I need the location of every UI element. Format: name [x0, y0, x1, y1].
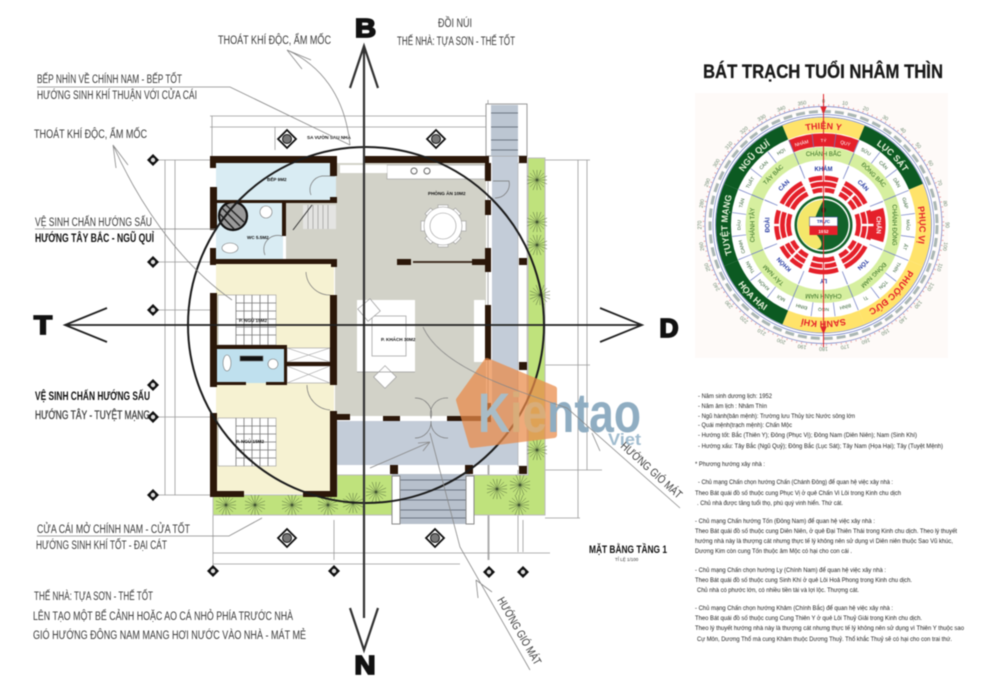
- plants: [216, 170, 550, 515]
- trigram names: CÀN: [777, 179, 791, 193]
- right column: east orientation: - Chủ mạng Chấn chọn hướng Chấn (Chánh Đông) để quan hệ việc xây nhà :: [698, 479, 893, 486]
- twenty-four mountain labels: MÙI: [776, 293, 787, 303]
- left note: WC north-west: [35, 216, 155, 245]
- outer degree labels: 80: [941, 200, 948, 207]
- right column: birth details: [698, 393, 943, 450]
- sector labels: LỤC SÁT: [876, 140, 910, 171]
- outer degree labels: 90: [944, 222, 950, 228]
- front stair: [392, 474, 474, 524]
- right column: east orientation: . Chủ nhà được tăng tuổi thọ, phú quý vinh hiển. Thứ cát.: [697, 500, 843, 507]
- right column: north orientation: [695, 605, 965, 643]
- outer degree labels: 150: [880, 327, 890, 336]
- bed 1: [218, 295, 276, 345]
- twenty-four mountain labels: TỊ: [862, 294, 869, 301]
- living room furniture: [357, 299, 485, 388]
- right column: birth details: - Năm âm lịch : Nhâm Thìn: [698, 403, 768, 410]
- left note: WC north-west: HƯỚNG TÂY BẮC - NGŨ QUỈ: [35, 232, 155, 245]
- watermark logo: Viet: [608, 430, 641, 449]
- entry threshold strip: [337, 416, 490, 421]
- twenty-four mountain separators: [728, 130, 919, 320]
- right column: south orientation: - Chủ mạng Chấn chọn hướng Ly (Chính Nam) để quan hệ việc xây nhà :: [695, 567, 886, 574]
- rear stair: [486, 104, 527, 156]
- outer degree labels: [698, 99, 950, 351]
- direction labels: CHÁNH TÂY: [750, 208, 756, 242]
- room: stair hall and main living space: [286, 163, 486, 416]
- right column: birth details: - Năm sinh dương lịch: 1952: [698, 393, 773, 400]
- outer degree labels: 20: [862, 106, 869, 113]
- direction labels: CHÁNH BẮC: [806, 150, 842, 158]
- right column: north orientation: Cự Môn, Dương Thổ mà cung Khảm thuộc Dương Thuỷ. Thổ khắc Thuỷ sẽ có hại cho con trai thứ.: [697, 636, 952, 643]
- outer degree labels: 60: [926, 159, 934, 168]
- left note: kitchen: [37, 72, 197, 102]
- right column: heading: * Phương hướng xây nhà :: [695, 461, 765, 468]
- bed 2: [218, 418, 276, 466]
- right column: north orientation: Theo lý thuyết hướng nhà này là thượng cát nhưng thực tế lý không nên sử dụng vì Thiên Y thuộc sao: [695, 625, 965, 632]
- outer degree labels: 200: [776, 336, 787, 345]
- twenty-four mountain labels: THÂN: [744, 259, 757, 275]
- twenty-four mountain labels: [736, 137, 912, 312]
- compass axis: west-east arrow: [65, 308, 642, 342]
- twenty-four mountain labels: TÂN: [737, 197, 747, 209]
- outer degree labels: 30: [881, 114, 889, 123]
- bottom note: site: LÊN TẠO MỘT BỂ CẢNH HOẶC AO CÁ NHỎ PHÍA TRƯỚC NHÀ: [33, 610, 293, 623]
- trigram ring separators: [749, 151, 898, 299]
- twenty-four mountain labels: TÝ: [820, 137, 827, 144]
- trigram names: CẤN: [856, 179, 870, 193]
- direction labels: CHÁNH ĐÔNG: [890, 204, 898, 246]
- sector labels: THIÊN Y: [804, 120, 842, 131]
- wind label south: HƯỚNG GIÓ MÁT: [494, 595, 544, 667]
- direction labels: ĐÔNG NAM: [859, 261, 887, 289]
- wind label east: HƯỚNG GIÓ MÁT: [618, 440, 685, 501]
- trigram names: TỐN: [856, 257, 870, 271]
- red trigrams: [774, 175, 874, 272]
- bagua wheel backdrop: [695, 93, 948, 358]
- central emblem: 1952: [818, 229, 829, 234]
- grid markers: [147, 130, 529, 578]
- outer degree labels: 260: [699, 241, 706, 251]
- right column: birth details: - Ngũ hành(bản mệnh): Trường lưu Thủy tức Nước sông lớn: [698, 413, 856, 420]
- left note: kitchen: BẾP NHÌN VỀ CHÍNH NAM - BẾP TỐT: [37, 72, 182, 86]
- right column: south orientation: Chủ nhà có phước lớn, có nhiều tiền tài và lợi lộc. Thượng cát.: [697, 587, 859, 594]
- twenty-four mountain labels: BÍNH: [838, 302, 852, 312]
- trigram names: KHÔN: [775, 256, 793, 274]
- bottom note: site: THẾ NHÀ: TỰA SƠN - THẾ TỐT: [34, 589, 153, 603]
- plan title: MẶT BẰNG TẦNG 1: [589, 543, 667, 556]
- outer degree labels: 110: [935, 262, 943, 272]
- room: bedrooms: [216, 264, 334, 494]
- room: kitchen: [216, 163, 336, 201]
- room labels: BẾP 9M2: [267, 176, 287, 182]
- room labels: [236, 133, 466, 444]
- sector labels: [719, 120, 926, 328]
- sector labels: TUYỆT MẠNG: [719, 194, 732, 257]
- room labels: WC 5.5M2: [247, 235, 269, 240]
- sector labels: HỌA HẠI: [738, 280, 768, 311]
- bagua circle over plan: [188, 147, 544, 503]
- outer degree labels: 240: [712, 281, 722, 292]
- top note: site: THẾ NHÀ: TỰA SƠN - THẾ TỐT: [397, 34, 515, 48]
- Chấn highlighted sector: [876, 210, 879, 240]
- sector labels: PHƯỚC ĐỨC: [868, 270, 914, 315]
- outer degree labels: 10: [841, 100, 848, 107]
- trigram name ring: [759, 160, 888, 290]
- twenty-four mountain labels: MÃO: [904, 220, 912, 231]
- outer degree labels: 140: [897, 314, 908, 324]
- twenty-four mountain labels: KHÔN: [756, 277, 771, 292]
- compass axis: north-south arrow: [350, 46, 378, 650]
- outer degree labels: 180: [819, 345, 828, 351]
- outer degree labels: 270: [698, 221, 704, 229]
- right column: south orientation: Theo Bát quái đồ số thuộc cung Sinh Khí ở quẻ Lôi Hoả Phong trong Kinh chu dịch.: [695, 577, 912, 584]
- trigram names: CHẤN: [874, 216, 882, 234]
- right column: birth details: - Hướng xấu: Tây Bắc (Ngũ Quỷ); Đông Bắc (Lục Sát); Tây Nam (Họa Hại); Tây (Tuyệt Mệnh): [698, 443, 943, 450]
- twenty-four mountain labels: SỬU: [859, 146, 873, 158]
- wheel title: BÁT TRẠCH TUỔI NHÂM THÌN: [703, 59, 943, 83]
- sector labels: SANH KHÍ: [800, 318, 846, 328]
- plan title: TỈ LỆ 1/100: [615, 555, 639, 562]
- right column: birth details: - Quái mệnh(trạch mệnh): Chấn Mộc: [698, 422, 792, 429]
- plan title: [589, 543, 667, 562]
- bottom note: site: GIÓ HƯỚNG ĐÔNG NAM MANG HƠI NƯỚC VÀO NHÀ - MÁT MẺ: [33, 629, 306, 642]
- room: WC: [216, 203, 283, 260]
- outer degree labels: 340: [776, 105, 787, 114]
- outer degree labels: 310: [724, 141, 734, 151]
- outer degree labels: 290: [704, 178, 712, 188]
- trigram names: [764, 166, 882, 283]
- outer degree labels: 300: [712, 158, 722, 169]
- right column: north orientation: Theo Bát quái đồ số thuộc cung Cung Thiên Y ở quẻ Lôi Thuỷ Giải trong Kinh chu dịch.: [695, 615, 922, 622]
- left note: main door: [36, 522, 190, 552]
- room labels: P. NGỦ 15M2: [236, 438, 264, 444]
- door swings: [264, 176, 509, 438]
- top note: hill: ĐỒI NÚI: [438, 17, 472, 30]
- right column: south-east orientation: [695, 518, 957, 555]
- direction letter D: D: [660, 313, 678, 343]
- direction letter B: B: [355, 13, 376, 43]
- direction labels: ĐÔNG BẮC: [860, 161, 888, 189]
- highlighted north cells: [791, 140, 856, 146]
- outer degree labels: 160: [860, 336, 871, 345]
- twenty-four mountain labels: HỢI: [776, 147, 787, 157]
- outer degree labels: 210: [757, 327, 767, 336]
- watermark logo: [459, 361, 641, 449]
- walls: [210, 156, 527, 497]
- top note: vent: THOÁT KHÍ ĐỘC, ẨM MỐC: [218, 33, 331, 47]
- direction labels: [750, 150, 898, 299]
- trigram names: KHẢM: [814, 166, 832, 173]
- dimension lines: [153, 100, 602, 572]
- right column: east orientation: [695, 479, 902, 507]
- dining table: [421, 205, 466, 247]
- twenty-four mountain labels: DẦN: [891, 177, 903, 189]
- outer degree labels: 330: [757, 114, 767, 123]
- left note: kitchen: HƯỚNG SINH KHÍ THUẬN VỚI CỬA CÁI: [37, 89, 197, 102]
- outer degree labels: 130: [913, 299, 923, 309]
- closets: [287, 348, 330, 383]
- outer degree labels: 250: [704, 262, 712, 272]
- twenty-four mountain labels: TUẤT: [744, 176, 757, 190]
- bagua wheel: [696, 93, 950, 352]
- twenty-four mountain labels: QUÝ: [839, 139, 852, 148]
- annotation leader lines: [35, 50, 680, 670]
- outer degree labels: 170: [840, 342, 850, 350]
- ring of twenty-four mountains: [738, 140, 908, 310]
- kitchen counter: [340, 165, 485, 179]
- trigram names: ĐOÀI: [764, 217, 772, 232]
- outer degree labels: 70: [935, 179, 943, 187]
- direction ring: [752, 154, 895, 296]
- twenty-four mountain labels: GIÁP: [900, 197, 910, 210]
- outer degree labels: 280: [699, 199, 706, 208]
- bathroom fixtures: [222, 206, 278, 371]
- outer degree labels: 120: [925, 281, 935, 292]
- twenty-four mountain labels: CẤN: [877, 159, 890, 172]
- sector labels: NGŨ QUỈ: [738, 138, 770, 172]
- spiral vent: [219, 202, 247, 230]
- stair flight: [293, 205, 336, 230]
- twenty-four mountain labels: CANH: [738, 239, 747, 254]
- garden strips: [213, 158, 545, 515]
- twenty-four mountain labels: ẤT: [901, 243, 909, 251]
- red meridian line: [821, 94, 826, 347]
- right column: south-east orientation: - Chủ mạng Chấn hướng Tốn (Đông Nam) để quan hệ việc xây nhà :: [695, 518, 875, 525]
- direction labels: CHÁNH NAM: [805, 292, 842, 299]
- outer degree labels: 220: [739, 314, 750, 324]
- outer degree labels: 100: [941, 242, 948, 251]
- outer degree labels: 350: [797, 100, 807, 108]
- outer tick and scale rings: [704, 105, 944, 345]
- outer degree labels: 190: [797, 342, 807, 350]
- right column: south-east orientation: Theo Bát quái đồ số thuộc cung Diên Niên, ở quẻ Đại Thiên Thái trong Kinh chu dịch. Theo lý thuyết: [695, 528, 957, 535]
- room labels: SA VƯỜN SAU NHÀ: [307, 133, 351, 140]
- left note: WC west: HƯỚNG TÂY - TUYỆT MẠNG: [35, 409, 150, 422]
- room labels: P. KHÁCH 30M2: [381, 336, 416, 342]
- floor plan: [147, 100, 602, 578]
- left note: main door: HƯỚNG SINH KHÍ TỐT - ĐẠI CÁT: [36, 538, 167, 552]
- right column: north orientation: - Chủ mạng Chấn chọn hướng Khảm (Chính Bắc) để quan hệ việc xây nhà :: [695, 605, 893, 612]
- room labels: P. NGỦ 15M2: [239, 317, 267, 323]
- trigram names: LY: [820, 277, 827, 283]
- left note: WC west: [35, 390, 150, 422]
- outer degree labels: 50: [914, 142, 922, 150]
- direction ring separators: [730, 132, 917, 318]
- left note: WC west: VỆ SINH CHẤN HƯỚNG SẤU: [35, 390, 150, 403]
- twenty-four mountain labels: NHÂM: [794, 138, 809, 149]
- left note: main door: CỬA CÁI MỞ CHÍNH NAM - CỬA TỐT: [37, 522, 190, 536]
- twenty-four mountain labels: TỐN: [877, 279, 889, 291]
- outer degree labels: 0: [822, 99, 825, 105]
- right column: south-east orientation: Dương Kim còn cung Tốn thuộc âm Mộc có hại cho con cái .: [695, 548, 852, 555]
- central emblem: TRỰC: [817, 219, 831, 224]
- watermark logo: Kientao: [478, 381, 641, 444]
- bottom note: site: [33, 589, 306, 642]
- corridor and porch: [335, 104, 518, 465]
- direction letter N: N: [354, 650, 376, 680]
- outer degree labels: 40: [898, 127, 907, 135]
- twenty-four mountain labels: NGỌ: [818, 306, 829, 312]
- left note: WC north-west: VỆ SINH CHẤN HƯỚNG SẤU: [35, 216, 152, 229]
- twenty-four mountain labels: THÌN: [891, 261, 903, 274]
- twenty-four mountain labels: DẬU: [736, 219, 742, 230]
- right column: south-east orientation: hướng nhà này là thượng cát nhưng thực tế lý không nên sử dụng vì Diên niên thuộc Sao Vũ khúc,: [695, 538, 953, 545]
- outer degree labels: 320: [739, 126, 750, 136]
- sector ring: eight mansions: [723, 125, 924, 325]
- twenty-four mountain labels: CÀN: [758, 159, 770, 171]
- sector labels: PHỤC VỊ: [916, 206, 926, 244]
- left note: vent: THOÁT KHÍ ĐỘC, ẨM MỐC: [34, 127, 147, 141]
- right column: south orientation: [695, 567, 912, 594]
- right column: east orientation: Theo Bát quái đồ số thuộc cung Phục Vị ở quẻ Chấn Vi Lôi trong Kinh chu dịch: [695, 490, 902, 497]
- strip beside corridor: [518, 163, 527, 466]
- direction labels: TÂY NAM: [762, 263, 786, 287]
- room labels: PHÒNG ĂN 10M2: [428, 189, 466, 196]
- twenty-four mountain labels: ĐINH: [795, 302, 808, 311]
- right column: birth details: - Hướng tốt: Bắc (Thiên Y); Đông (Phục Vị); Đông Nam (Diên Niên); Nam (Sinh Khí): [698, 432, 917, 439]
- direction letter T: T: [34, 310, 52, 340]
- outer degree labels: 230: [724, 299, 734, 309]
- central emblem: [794, 196, 852, 254]
- bathroom 2: [216, 348, 284, 383]
- direction labels: TÂY BẮC: [761, 162, 786, 187]
